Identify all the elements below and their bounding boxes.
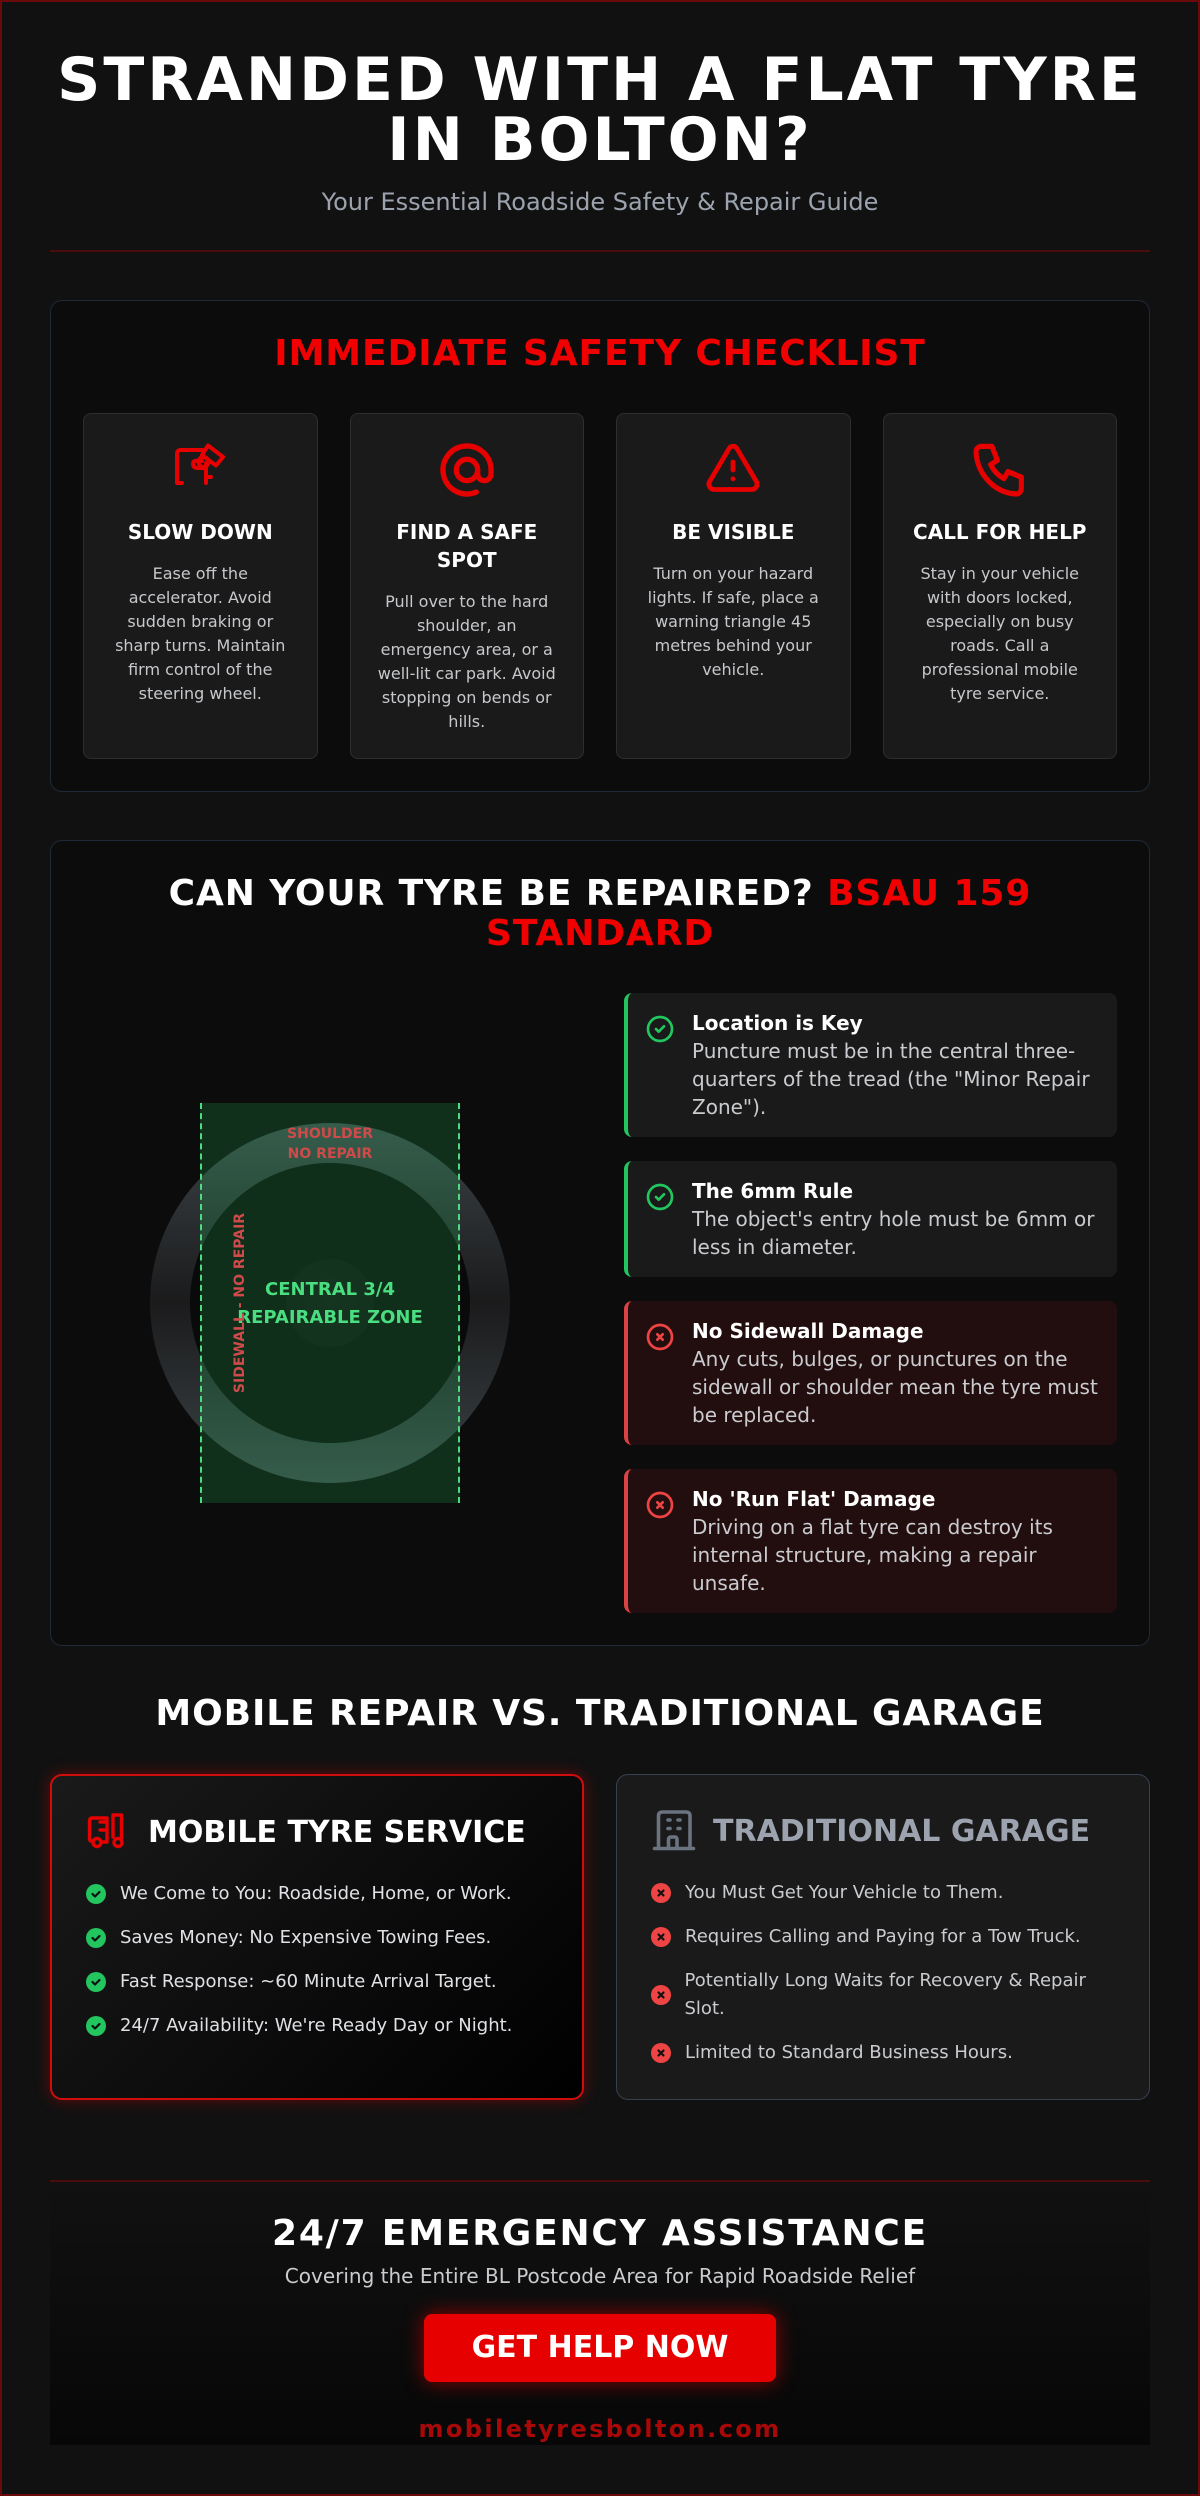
text: find a safe spot: hills. xyxy=(448,712,485,731)
icon: cross xyxy=(646,1492,674,1518)
text: find a safe spot: emergency area, or a xyxy=(381,640,553,659)
rule: no run flat damage xyxy=(624,1469,1117,1613)
wheel hub xyxy=(286,1259,374,1347)
label: sidewall no repair: SIDEWALL - NO REPAIR xyxy=(232,1213,248,1393)
card: find a safe spot xyxy=(350,413,584,759)
text: no run flat damage: No 'Run Flat' Damage xyxy=(692,1487,935,1511)
text: be visible: vehicle. xyxy=(702,660,764,679)
heading: repair standard xyxy=(169,873,1031,954)
text: be visible: warning triangle 45 xyxy=(655,612,811,631)
title xyxy=(57,45,1143,175)
label: shoulder no repair xyxy=(287,1126,373,1162)
text: call for help: especially on busy xyxy=(926,612,1074,631)
label: shoulder no repair: NO REPAIR xyxy=(288,1146,372,1162)
heading: be visible: BE VISIBLE xyxy=(672,520,794,544)
list: garage drawbacks xyxy=(651,1882,1086,2063)
label: central repairable zone: REPAIRABLE ZONE xyxy=(237,1307,423,1328)
text: slow down: Ease off the xyxy=(153,564,248,583)
button: get help now: GET HELP NOW xyxy=(472,2330,728,2365)
heading: find a safe spot: FIND A SAFE xyxy=(396,520,537,544)
tyre inner circle xyxy=(190,1163,470,1443)
icon: cross xyxy=(646,1324,674,1350)
heading: repair standard: STANDARD xyxy=(486,913,714,954)
item: availability: 24/7 Availability: We're Ready Day or Night. xyxy=(120,2015,512,2036)
rule: location is key xyxy=(624,993,1117,1137)
list: mobile benefits xyxy=(86,1883,512,2036)
repairable zone overlay xyxy=(200,1103,460,1503)
text: call for help: Stay in your vehicle xyxy=(920,564,1079,583)
heading: traditional garage: TRADITIONAL GARAGE xyxy=(713,1814,1090,1849)
item: long waits: Slot. xyxy=(684,1998,725,2019)
text: no run flat damage: unsafe. xyxy=(692,1571,766,1595)
item: fast response: Fast Response: ~60 Minute Arrival Target. xyxy=(120,1971,497,1992)
panel: traditional garage xyxy=(616,1774,1150,2100)
item: long waits: Potentially Long Waits for Recovery & Repair xyxy=(684,1970,1086,1991)
panel: can your tyre be repaired xyxy=(50,840,1150,1646)
text: no sidewall damage: Any cuts, bulges, or punctures on the xyxy=(692,1347,1068,1371)
website: mobiletyresbolton.com xyxy=(418,2415,782,2443)
heading: safety checklist: IMMEDIATE SAFETY CHECKLIST xyxy=(274,333,926,374)
text: location is key: Location is Key xyxy=(692,1011,863,1035)
text: be visible: lights. If safe, place a xyxy=(648,588,819,607)
text: slow down xyxy=(115,564,285,703)
rule: 6mm xyxy=(624,1161,1117,1277)
text: call for help: with doors locked, xyxy=(927,588,1073,607)
icon: pedal xyxy=(175,443,226,485)
text: 6mm rule: The 6mm Rule xyxy=(692,1179,853,1203)
title: STRANDED WITH A FLAT TYRE xyxy=(57,45,1143,115)
tyre outer ring xyxy=(150,1123,510,1483)
text: call for help: roads. Call a xyxy=(950,636,1049,655)
text: no sidewall damage: be replaced. xyxy=(692,1403,816,1427)
rule: no sidewall damage xyxy=(624,1301,1117,1445)
panel: mobile tyre service xyxy=(50,1774,584,2100)
heading: emergency: 24/7 EMERGENCY ASSISTANCE xyxy=(272,2213,928,2254)
text: no sidewall damage: No Sidewall Damage xyxy=(692,1319,924,1343)
text: slow down: sudden braking or xyxy=(127,612,273,631)
text: location is key xyxy=(692,1011,1090,1119)
item: business hours: Limited to Standard Business Hours. xyxy=(685,2042,1013,2063)
text: no run flat damage: internal structure, making a repair xyxy=(692,1543,1037,1567)
panel: immediate safety checklist xyxy=(50,300,1150,792)
text: call for help: professional mobile xyxy=(922,660,1078,679)
text: find a safe spot xyxy=(378,592,556,731)
text: no run flat damage: Driving on a flat tyre can destroy its xyxy=(692,1515,1053,1539)
text: 6mm rule: less in diameter. xyxy=(692,1235,857,1259)
text: find a safe spot: shoulder, an xyxy=(417,616,517,635)
item: long waits xyxy=(651,1970,1086,2019)
heading: find a safe spot xyxy=(396,520,537,572)
text: location is key: Puncture must be in the central three- xyxy=(692,1039,1075,1063)
text: slow down: sharp turns. Maintain xyxy=(115,636,285,655)
text: coverage: Covering the Entire BL Postcode Area for Rapid Roadside Relief xyxy=(285,2264,915,2288)
text: no run flat damage xyxy=(692,1487,1053,1595)
icon: phone xyxy=(974,444,1024,497)
subtitle: Your Essential Roadside Safety & Repair Guide xyxy=(322,188,878,216)
text: location is key: Zone"). xyxy=(692,1095,766,1119)
card: be visible xyxy=(616,413,850,759)
text: no sidewall damage xyxy=(692,1319,1098,1427)
label: shoulder no repair: SHOULDER xyxy=(287,1126,373,1142)
text: be visible: metres behind your xyxy=(655,636,812,655)
diagram: tyre repair zones xyxy=(150,1103,510,1503)
text: call for help: tyre service. xyxy=(950,684,1049,703)
text: find a safe spot: stopping on bends or xyxy=(382,688,552,707)
text: slow down: steering wheel. xyxy=(139,684,262,703)
card: slow down xyxy=(83,413,318,759)
item: get vehicle: You Must Get Your Vehicle to Them. xyxy=(685,1882,1003,1903)
icon: check xyxy=(646,1184,674,1210)
text: find a safe spot: well-lit car park. Avoid xyxy=(378,664,556,683)
icon: check xyxy=(646,1016,674,1042)
footer: emergency assistance xyxy=(50,2180,1150,2445)
text: 6mm rule: The object's entry hole must be 6mm or xyxy=(692,1207,1094,1231)
icon: building xyxy=(652,1810,696,1850)
item: we come to you: We Come to You: Roadside, Home, or Work. xyxy=(120,1883,512,1904)
text: location is key: quarters of the tread (the "Minor Repair xyxy=(692,1067,1090,1091)
text: slow down: accelerator. Avoid xyxy=(129,588,272,607)
heading: comparison: MOBILE REPAIR VS. TRADITIONAL GARAGE xyxy=(155,1693,1045,1734)
heading: call for help: CALL FOR HELP xyxy=(913,520,1086,544)
text: no sidewall damage: sidewall or shoulder mean the tyre must xyxy=(692,1375,1098,1399)
title: IN BOLTON? xyxy=(387,105,813,175)
card: call for help xyxy=(882,413,1117,759)
text: slow down: firm control of the xyxy=(128,660,272,679)
icon: truck xyxy=(88,1813,124,1848)
icon: warning triangle xyxy=(706,444,760,492)
text: find a safe spot: Pull over to the hard xyxy=(385,592,548,611)
header xyxy=(57,45,1143,216)
label: central repairable zone: CENTRAL 3/4 xyxy=(265,1279,395,1300)
text: be visible: Turn on your hazard xyxy=(653,564,813,583)
item: tow truck: Requires Calling and Paying for a Tow Truck. xyxy=(685,1926,1081,1947)
text: call for help xyxy=(920,564,1079,703)
icon: at sign xyxy=(440,443,494,497)
text: 6mm rule xyxy=(692,1179,1094,1259)
text: be visible xyxy=(648,564,819,679)
heading: mobile tyre service: MOBILE TYRE SERVICE xyxy=(148,1815,526,1850)
button: get help now xyxy=(424,2314,776,2382)
item: saves money: Saves Money: No Expensive Towing Fees. xyxy=(120,1927,491,1948)
label: central repairable zone xyxy=(237,1279,423,1328)
heading: repair standard: CAN YOUR TYRE BE REPAIRED? BSAU 159 xyxy=(169,873,1031,914)
heading: find a safe spot: SPOT xyxy=(437,548,497,572)
heading: slow down: SLOW DOWN xyxy=(128,520,273,544)
